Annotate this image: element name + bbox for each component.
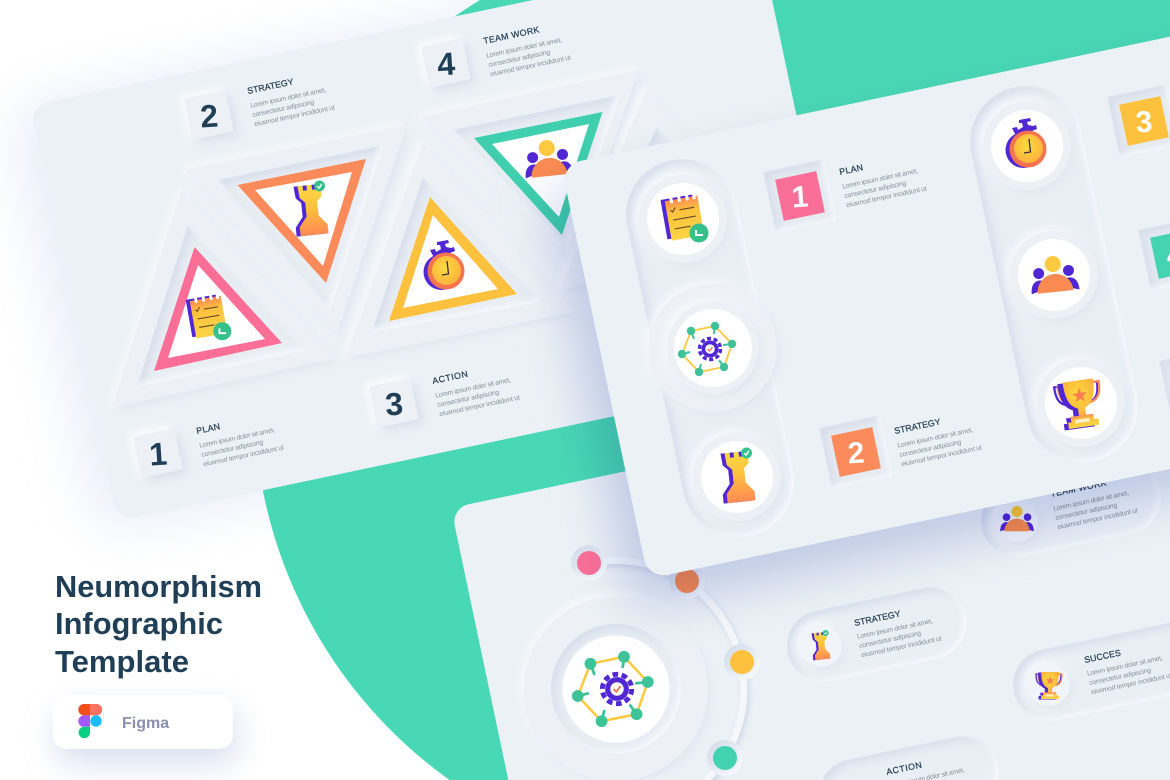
title [55, 570, 262, 679]
triangle cell: success [560, 90, 780, 290]
text: team work: eiusmod tempor incididunt ut [1057, 507, 1139, 531]
teal circle backdrop [254, 0, 1170, 780]
text: succes [1083, 638, 1170, 696]
circle: stopwatch [983, 102, 1071, 190]
text: plan: PLAN [195, 421, 221, 436]
text: team work: eiusmod tempor incididunt ut [490, 54, 572, 78]
text: succes: eiusmod tempor incididunt ut [1091, 672, 1170, 696]
text: team work [482, 19, 572, 78]
panel 2 shadow [545, 30, 1170, 609]
text: plan: consectetur adipiscing [201, 439, 264, 459]
number box 2: 2 [199, 97, 219, 135]
number box 1 [133, 428, 183, 478]
icon: trophy small [1036, 672, 1062, 700]
text: succes: Lorem ipsum dolor sit amet, [1087, 655, 1164, 678]
number box 3: 3 [384, 385, 404, 423]
text: action [431, 359, 521, 418]
triangle cell: strategy [185, 125, 407, 333]
text: team work: Lorem ipsum dolor sit amet, [1053, 490, 1130, 513]
text: plan: Lorem ipsum dolor sit amet, [842, 168, 919, 191]
text: succes: SUCCES [1083, 648, 1122, 665]
text: plan: eiusmod tempor incididunt ut [846, 185, 928, 209]
text: strategy [246, 69, 336, 128]
text: action [885, 751, 966, 780]
text: strategy: consectetur adipiscing [859, 630, 922, 650]
curved track [589, 560, 744, 780]
number tile 2 [819, 415, 893, 489]
text: strategy: STRATEGY [893, 416, 942, 436]
node: yellow [724, 644, 760, 680]
icon: team [1028, 254, 1080, 294]
hub with gear icon [524, 597, 708, 780]
title: Infographic [55, 607, 223, 641]
pill: action [812, 730, 1005, 780]
triangle cell: plan [112, 190, 336, 408]
circle: rook [693, 433, 781, 521]
icon: notepad [186, 293, 231, 340]
number box 2 [184, 90, 234, 140]
icon: trophy [1054, 378, 1105, 431]
text: plan: consectetur adipiscing [844, 180, 907, 200]
title: Template [55, 645, 189, 679]
text: strategy [893, 409, 983, 468]
text: team work: consectetur adipiscing [488, 49, 551, 69]
text: strategy: Lorem ipsum dolor sit amet, [250, 87, 327, 110]
text: team work: TEAM WORK [1049, 477, 1107, 499]
number tile 2: 2 [847, 436, 866, 471]
right pill track [960, 76, 1148, 473]
text: plan: eiusmod tempor incididunt ut [203, 444, 285, 468]
panel 1 glow on background [16, 0, 835, 527]
panel: triangle infographic [30, 0, 849, 521]
icon: rook small [810, 630, 831, 660]
text: strategy: eiusmod tempor incididunt ut [861, 635, 942, 659]
icon: stopwatch [1006, 118, 1046, 168]
figma badge [53, 695, 233, 749]
icon: notepad [660, 193, 708, 242]
number box 4 [421, 38, 471, 88]
text: strategy: eiusmod tempor incididunt ut [901, 444, 983, 468]
number tile 1: 1 [791, 180, 810, 215]
number box 4: 4 [436, 45, 456, 83]
text: strategy: eiusmod tempor incididunt ut [254, 104, 336, 128]
circle: trophy [1037, 359, 1125, 447]
panel: timeline infographic [451, 322, 1170, 780]
number box 1: 1 [148, 435, 168, 473]
text: team work: TEAM WORK [482, 24, 540, 46]
number tile 3: 3 [1135, 105, 1154, 140]
pill: team work [974, 456, 1167, 564]
text: plan [838, 150, 928, 209]
number tile 4 [1138, 217, 1170, 291]
text: action: ACTION [431, 369, 469, 386]
text: team work: consectetur adipiscing [1055, 502, 1118, 522]
text: action: consectetur adipiscing [437, 389, 500, 409]
pill: strategy [780, 581, 973, 689]
icon: team small [1000, 506, 1034, 531]
circle: gear network [649, 284, 777, 412]
text: team work: Lorem ipsum dolor sit amet, [486, 37, 563, 60]
left pill track [616, 149, 805, 548]
panel 2 card [561, 0, 1170, 579]
number box 3 [369, 378, 419, 428]
text: strategy: STRATEGY [853, 608, 902, 628]
text: succes: consectetur adipiscing [1089, 667, 1152, 687]
number tile 5 [1159, 348, 1170, 422]
text: action: ACTION [885, 760, 923, 777]
panel 1 card [30, 0, 849, 521]
node: teal [707, 740, 743, 776]
number tile 1 [763, 159, 837, 233]
text: team work [1049, 472, 1139, 531]
triangle cell: action [346, 143, 575, 358]
triangle cell: team work [421, 70, 639, 260]
icon: rook [718, 447, 757, 504]
text: action: Lorem ipsum dolor sit amet, [435, 377, 512, 400]
figma label: Figma [122, 715, 169, 732]
text: strategy: consectetur adipiscing [899, 439, 962, 459]
text: plan: PLAN [838, 162, 864, 177]
circle: team [1010, 231, 1098, 319]
text: strategy: STRATEGY [246, 76, 295, 96]
panel: pill infographic [561, 0, 1170, 579]
node: orange [669, 563, 705, 599]
icon: gear network [573, 652, 652, 726]
circle: plan [639, 175, 727, 263]
pill: succes [1006, 604, 1170, 728]
icon: rook [291, 180, 330, 237]
number tile 3 [1107, 84, 1170, 158]
icon: figma logo [78, 704, 102, 738]
icon: gear network [679, 323, 735, 375]
text: strategy: Lorem ipsum dolor sit amet, [897, 427, 974, 450]
icon: stopwatch [424, 240, 464, 290]
node: pink [571, 545, 607, 581]
text: plan: Lorem ipsum dolor sit amet, [199, 427, 276, 450]
text: strategy [853, 601, 942, 659]
panel 3 card [451, 322, 1170, 780]
text: action: eiusmod tempor incididunt ut [439, 394, 521, 418]
title: Neumorphism [55, 570, 262, 604]
text: strategy: Lorem ipsum dolor sit amet, [857, 618, 934, 641]
text: strategy: consectetur adipiscing [252, 99, 315, 119]
icon: team [522, 138, 574, 178]
text: plan [195, 409, 285, 468]
